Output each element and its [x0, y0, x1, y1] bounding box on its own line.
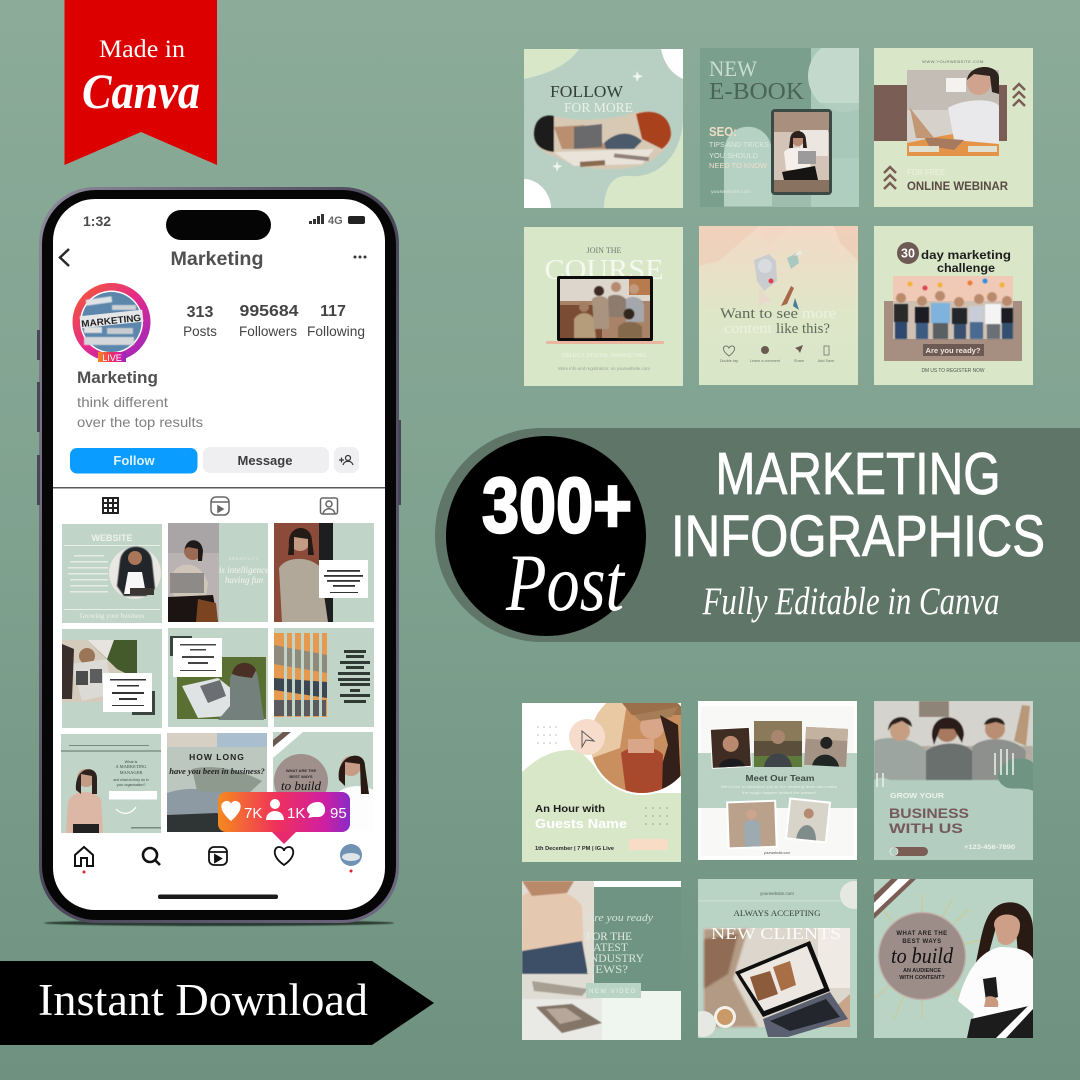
card: join the course: JOIN THE [587, 246, 621, 255]
badge: 300+ post [446, 436, 646, 636]
laptop [546, 276, 664, 344]
status bar: 4G [328, 215, 343, 227]
comments count: 95 [330, 805, 347, 822]
icon: activity heart [275, 847, 293, 865]
card: join the course: More info and registration: on yourwebsite.com [558, 366, 651, 371]
card: new e-book: NEW [709, 56, 757, 81]
profile header [60, 249, 366, 270]
card: an hour with guest [522, 683, 702, 862]
post thumbnail: how long [167, 733, 267, 832]
card: want to see more content: like this? [776, 321, 830, 337]
profile bio: over the top results [77, 414, 203, 430]
guest photo [582, 683, 702, 803]
card: latest industry news: NEWS? [586, 962, 628, 976]
card: latest industry news [522, 881, 681, 1040]
card: new e-book: YOU SHOULD [709, 151, 759, 160]
post thumbnail: website [62, 524, 162, 623]
laptop flat lay photo [704, 928, 850, 1037]
avatar with live badge [72, 283, 150, 363]
icon: person [266, 799, 284, 820]
card: want to see more content: content [724, 321, 772, 337]
add person button [334, 447, 359, 473]
people group [894, 278, 1013, 339]
lifestyle photos [522, 881, 602, 1033]
message button: Message [238, 453, 292, 468]
icon: search [143, 848, 160, 865]
card: new clients: yourwebsite.com [760, 891, 794, 896]
team photos top [710, 721, 848, 769]
card: meet our team: Meet Our Team [746, 773, 815, 783]
profile stats: 995684 [240, 303, 299, 320]
card: new e-book: yourwebsite.com [711, 189, 751, 194]
followers count: 1K [287, 805, 305, 822]
card: join the course [524, 227, 683, 386]
post thumbnail: build an audience: BEST WAYS [289, 774, 313, 779]
post thumbnail: creativity: CREATIVITY [229, 557, 259, 561]
status bar: 1:32 [83, 213, 111, 229]
new video tag [586, 983, 641, 998]
post thumbnail: build an audience: to build [281, 778, 322, 793]
card: an hour with guest: An Hour with [535, 803, 605, 815]
are you ready tag [923, 344, 984, 356]
profile stats: Following [307, 324, 365, 339]
card: 30 day marketing challenge: 30 [901, 246, 915, 260]
card: online webinar: WWW.YOURWEBSITE.COM [922, 59, 984, 64]
post thumbnail: social media quote [168, 628, 268, 727]
post thumbnail: how long: HOW LONG [189, 752, 245, 762]
card: best ways to build: WHAT ARE THE [896, 931, 948, 937]
profile bio: Marketing [77, 368, 158, 387]
contact button [890, 847, 928, 856]
action icons: Add Save [818, 359, 834, 363]
card photo [534, 111, 671, 169]
card: new clients: NEW CLIENTS [711, 924, 841, 943]
follow button: Follow [113, 453, 155, 468]
profile stats: 117 [320, 303, 346, 320]
card: online webinar: FOR FREE [907, 168, 945, 177]
avatar with live badge: LIVE [102, 353, 122, 363]
icon: grid tab [103, 498, 118, 513]
tablet mockup [771, 109, 832, 195]
follow button [70, 448, 198, 474]
icon: tagged tab [320, 498, 338, 514]
action icons [720, 345, 834, 363]
team celebration photo [874, 701, 1033, 780]
webinar photo [907, 67, 999, 156]
card: best ways to build: AN AUDIENCE [903, 968, 941, 974]
avatar with live badge: MARKETING [81, 313, 142, 330]
card: want to see more content: Want to see [720, 306, 798, 322]
title line 1: MARKETING [716, 441, 1000, 507]
post thumbnail: creativity: having fun [225, 575, 264, 585]
ribbon: made in canva [64, 0, 217, 165]
card: latest industry news: Are you ready [586, 912, 653, 924]
ribbon: instant download [0, 961, 434, 1045]
card: online webinar: ONLINE WEBINAR [907, 181, 1009, 193]
icon: heart [221, 801, 241, 821]
card: join the course: COURSE [544, 254, 664, 286]
bottom nav bar [75, 844, 362, 899]
message button [203, 447, 329, 473]
profile stats: 313 [187, 304, 213, 321]
phone mockup [37, 187, 401, 926]
likes count: 7K [244, 805, 262, 822]
ribbon text: canva: Canva [82, 63, 200, 119]
card: follow for more: FOLLOW [550, 82, 624, 101]
profile stats: Posts [183, 324, 217, 339]
card: an hour with guest: 1th December | 7 PM | IG Live [535, 846, 614, 852]
card: 30 day marketing challenge: challenge [937, 261, 995, 275]
card: best ways to build: BEST WAYS [902, 939, 942, 945]
card: new e-book: E-BOOK [709, 79, 805, 105]
card: want to see more content: more [802, 306, 836, 322]
post thumbnail: marketing manager: What is [125, 760, 137, 764]
card: new e-book: SEO: [709, 124, 737, 139]
post thumbnail: creativity [168, 523, 269, 622]
card: new clients: ALWAYS ACCEPTING [734, 909, 821, 918]
status bar [83, 210, 365, 240]
are you ready tag: Are you ready? [926, 348, 980, 355]
card: grow your business: +123-456-7890 [964, 844, 1015, 851]
card: join the course: SELECT DIGITAL MARKETING [562, 353, 646, 359]
card: grow your business: GROW YOUR [890, 791, 945, 800]
post thumbnail: how long: have you been in business? [169, 766, 265, 776]
post thumbnail: marketing manager: A MARKETING [115, 764, 147, 769]
card: new e-book: NEED TO KNOW [709, 161, 768, 170]
post thumbnail: build an audience [273, 732, 373, 794]
profile stats: Followers [239, 324, 297, 339]
card: follow for more: FOR MORE [564, 101, 633, 116]
card: 30 day marketing challenge: DM US TO REGISTER NOW [922, 368, 985, 374]
engagement badge [218, 792, 350, 844]
card: meet our team: yourwebsite.com [764, 851, 790, 855]
new video tag: NEW VIDEO [589, 989, 637, 995]
icon: chevrons up left [884, 167, 896, 189]
card: follow for more [524, 49, 683, 208]
card: online webinar [874, 48, 1033, 207]
post thumbnail: website calling card [274, 523, 374, 622]
team photos bottom [726, 797, 831, 849]
action icons: Leave a comment [750, 359, 781, 363]
icon: chevrons up right [1013, 84, 1025, 106]
post thumbnail: build an audience: WHAT ARE THE [286, 768, 316, 773]
download label: Instant Download [38, 975, 368, 1025]
post thumbnail: marketing manager: and what do they do in [113, 778, 149, 782]
card: 30 day marketing challenge: day marketing [921, 248, 1011, 262]
card: latest industry news: INDUSTRY [586, 951, 644, 965]
ribbon text: made in: Made in [99, 36, 186, 63]
icon: reels [209, 847, 227, 865]
card: best ways to build [874, 879, 1033, 1038]
post thumbnail: top of the funnel [274, 628, 374, 727]
card: grow your business: BUSINESS [889, 805, 969, 821]
post thumbnail: marketing manager [61, 734, 161, 833]
statue and hands collage [754, 250, 802, 310]
profile bio [77, 368, 203, 430]
woman with phone [958, 902, 1033, 1038]
post thumbnail: creativity: is intelligence [219, 565, 269, 575]
action icons: Share [794, 359, 804, 363]
post thumbnail: website: Growing your business [80, 612, 145, 620]
card: an hour with guest: Guests Name [535, 817, 627, 831]
badge: 300+ post: 300+ [482, 461, 632, 549]
post thumbnail: marketing manager: your organisation? [117, 783, 145, 787]
icon: home [75, 847, 93, 866]
subtitle: Fully Editable in Canva [702, 580, 1000, 623]
action icons: Double tap [720, 359, 738, 363]
post thumbnail: marketing manager: MANAGER [120, 770, 142, 775]
card: new e-book [700, 48, 859, 207]
card: grow your business: WITH US [889, 820, 963, 836]
card: 30 day marketing challenge [874, 226, 1033, 385]
post thumbnail: dreams quote [62, 629, 162, 728]
card: new clients [690, 879, 868, 1038]
post thumbnail: website: WEBSITE [91, 533, 133, 543]
card: want to see more content [699, 226, 858, 385]
icon: reels tab [211, 497, 229, 515]
card: latest industry news: FOR THE [586, 929, 632, 943]
card: latest industry news: LATEST [586, 940, 629, 954]
card: grow your business [874, 701, 1033, 860]
profile header: Marketing [170, 249, 264, 270]
profile stats [183, 303, 365, 339]
card: meet our team: We'd love to introduce you to our amazing team who make [721, 785, 837, 789]
icon: live chat badge [569, 719, 605, 755]
phone screen [53, 199, 385, 910]
card: best ways to build: WITH CONTENT? [899, 975, 945, 981]
card: best ways to build: to build [891, 943, 954, 968]
icon: profile avatar [340, 844, 362, 866]
profile bio: think different [77, 394, 168, 410]
card: meet our team: the magic happen behind the scenes! [742, 791, 816, 795]
banner: marketing infographics [435, 428, 1080, 642]
card: new e-book: TIPS AND TRICKS [709, 140, 769, 149]
icon: comment [307, 802, 325, 818]
card: meet our team [698, 701, 857, 860]
badge: 300+ post: Post [505, 537, 626, 628]
